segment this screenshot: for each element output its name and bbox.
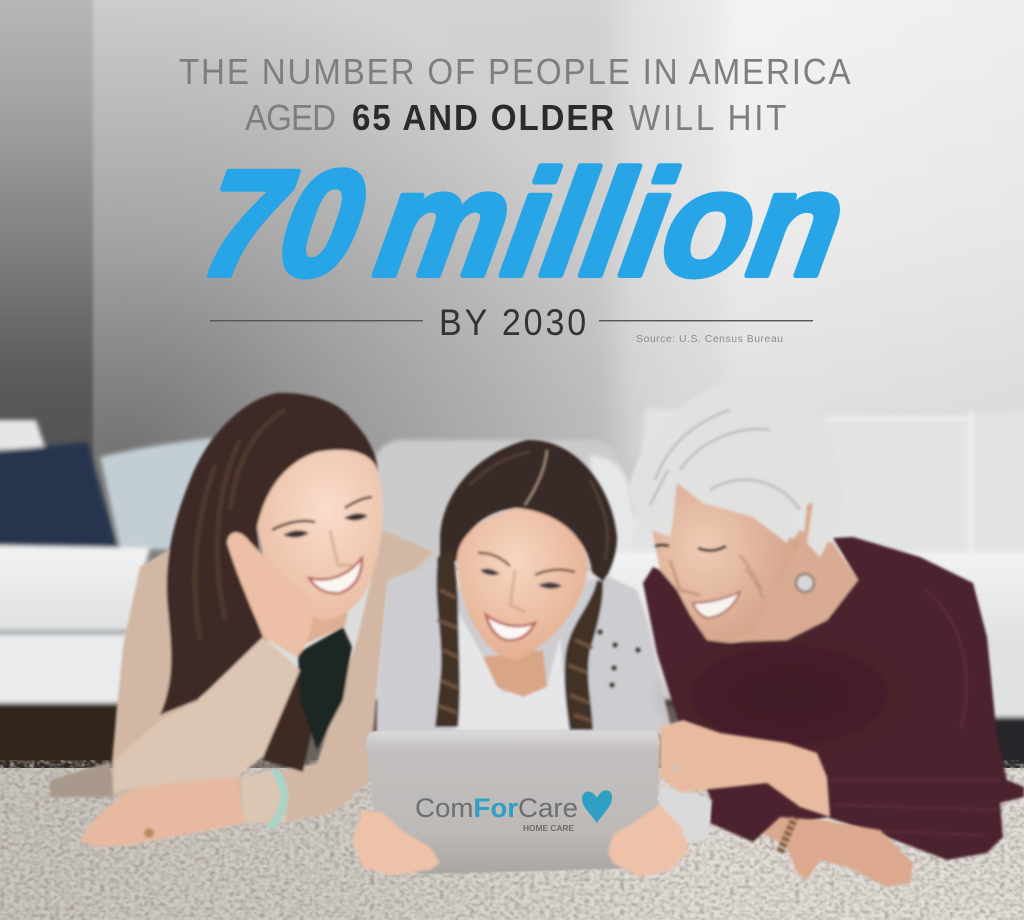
carpet	[0, 768, 1024, 920]
word million: million	[366, 140, 856, 308]
logo wordmark: ComForCare	[415, 793, 578, 823]
neck	[300, 600, 350, 645]
hands and sleeve in front of the tablet	[352, 720, 913, 887]
pointing hand	[660, 720, 830, 817]
person: mother on the left	[50, 393, 433, 846]
hand on cheek	[227, 532, 313, 657]
big statistic	[192, 140, 856, 308]
left hand of the girl	[352, 810, 440, 875]
hair behind arm	[263, 660, 318, 772]
face	[257, 450, 383, 620]
heading line 2: will hit: WILL HIT	[629, 99, 786, 138]
heading line 2: bold: 65 AND OLDER	[352, 99, 614, 138]
face	[652, 483, 800, 643]
dark top	[298, 627, 352, 750]
icon: heart	[582, 790, 612, 823]
braids	[435, 547, 460, 727]
sleeve of the girl	[660, 785, 712, 842]
right hand of the girl	[608, 805, 690, 877]
white hair	[628, 380, 843, 557]
cardigan	[112, 530, 433, 823]
heading line 2: aged: AGED	[245, 99, 336, 138]
number 70: 70	[192, 140, 375, 308]
shirt	[452, 600, 568, 730]
hair	[160, 393, 378, 715]
sweater	[377, 562, 672, 735]
heading text	[179, 53, 851, 138]
neck	[730, 530, 858, 642]
forearm and hand	[80, 777, 245, 846]
sofa and floor	[0, 408, 1024, 780]
lower hand	[763, 817, 913, 887]
person: girl in the centre	[377, 440, 672, 735]
tablet with logo	[366, 731, 660, 874]
year: BY 2030	[439, 302, 586, 343]
face	[457, 508, 587, 660]
bracelet	[780, 817, 795, 852]
background: room wall and window light	[0, 0, 1024, 570]
eyes, brows and smile	[478, 553, 510, 566]
cuff	[240, 770, 287, 823]
person: grandmother on the right	[628, 380, 1024, 860]
sweater	[643, 537, 1024, 860]
heading line 1: THE NUMBER OF PEOPLE IN AMERICA	[179, 53, 851, 92]
sleeve	[113, 637, 300, 793]
eyes, brows and smile	[272, 521, 315, 530]
ear	[803, 503, 827, 550]
neck	[483, 650, 547, 697]
spots on the cardigan	[505, 632, 638, 722]
earring	[796, 574, 814, 592]
elbow behind	[50, 762, 115, 797]
logo subtitle: HOME CARE	[523, 823, 574, 833]
eyes and smile	[655, 545, 726, 551]
source: Source: U.S. Census Bureau	[636, 333, 783, 345]
hair	[440, 440, 617, 582]
